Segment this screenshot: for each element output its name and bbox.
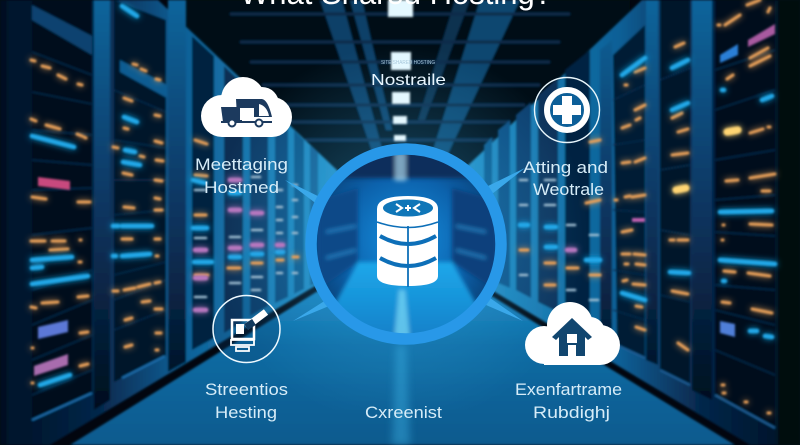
connector spokes <box>285 168 525 321</box>
floor centre light streak <box>392 345 410 445</box>
icon: cloud with delivery van <box>201 77 292 137</box>
label: lower centre: Cxreenist <box>365 403 442 422</box>
label: lower right: Rubdighj <box>533 403 610 422</box>
icon: medical plus in rings <box>534 78 600 142</box>
icon: cloud with house <box>525 302 620 365</box>
icon: database cylinder <box>377 196 438 287</box>
rack display panels <box>34 24 775 376</box>
label: lower right <box>515 380 622 422</box>
label: upper right <box>523 158 608 199</box>
hub interior scene <box>316 154 496 334</box>
label: upper right: Atting and <box>523 158 608 177</box>
rack bright yellow lights <box>676 130 738 190</box>
central hub: ring and database <box>310 149 501 345</box>
floor <box>70 240 735 445</box>
label: upper left <box>195 155 288 197</box>
pale distant lights <box>195 177 598 300</box>
icon: monitor and pen in circle <box>213 296 280 362</box>
ceiling beams <box>170 0 630 200</box>
left rack wall <box>0 0 360 445</box>
aisle haze <box>200 40 600 410</box>
label: lower right: Exenfartrame <box>515 380 622 399</box>
label: upper left: Meettaging <box>195 155 288 174</box>
right rack wall <box>440 0 800 445</box>
label: lower left <box>205 380 288 422</box>
hub ring <box>311 149 501 339</box>
ceiling light tiles <box>388 0 413 141</box>
label: lower left: Hesting <box>215 403 277 422</box>
label: upper right: Weotrale <box>533 180 604 199</box>
rack status lights: blue <box>32 6 775 385</box>
label: top centre: Nostraile <box>371 72 446 89</box>
label: top small caption: SITE SHARED HOSTING <box>381 60 435 66</box>
label: upper left: Hostmed <box>204 178 279 197</box>
label: lower left: Streentios <box>205 380 288 399</box>
rack status lights: pink and violet <box>195 180 575 310</box>
